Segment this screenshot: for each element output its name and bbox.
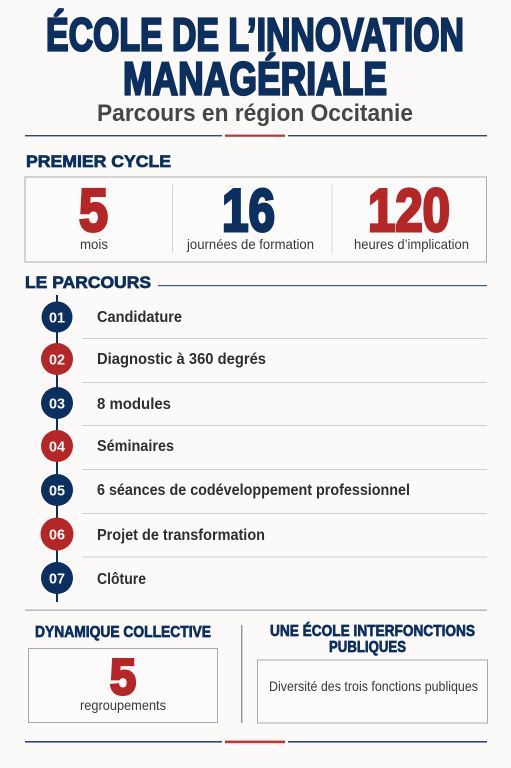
step 04 — [41, 430, 174, 462]
vertical divider — [241, 625, 242, 723]
step 07: Clôture — [97, 571, 146, 588]
stat: 16 journées de formation — [186, 177, 314, 252]
step 07: 07 — [49, 570, 65, 588]
step 04: Séminaires — [97, 438, 174, 455]
section divider — [25, 610, 487, 611]
step 01: 01 — [49, 310, 65, 326]
stat: 120 heures d'implication: heures d’implication — [354, 236, 469, 252]
step 03: 8 modules — [97, 396, 171, 413]
heading: une école interfonctions publiques: UNE ÉCOLE INTERFONCTIONS — [270, 623, 475, 640]
step 05: 6 séances de codéveloppement professionnel — [97, 482, 410, 499]
subtitle: Parcours en région Occitanie — [97, 100, 413, 127]
step 02: Diagnostic à 360 degrés — [97, 351, 266, 368]
heading: premier cycle: PREMIER CYCLE — [26, 152, 171, 171]
panel: dynamique collective — [28, 648, 218, 722]
step 03 — [41, 387, 171, 419]
timeline: le parcours — [40, 295, 487, 602]
step 05 — [41, 474, 410, 506]
stat: 5 mois: mois — [80, 236, 108, 252]
panel: une école interfonctions publiques: Diversité des trois fonctions publiques — [269, 678, 478, 694]
step 06 — [40, 518, 265, 550]
step 06: 06 — [49, 526, 65, 544]
heading: le parcours: LE PARCOURS — [25, 273, 151, 292]
heading: une école interfonctions publiques — [270, 623, 475, 656]
step 06: Projet de transformation — [97, 527, 265, 544]
panel: premier cycle — [25, 177, 486, 262]
step 02: 02 — [49, 352, 65, 368]
step 01: Candidature — [97, 309, 182, 326]
step 07 — [41, 562, 146, 594]
panel: une école interfonctions publiques — [258, 660, 488, 723]
bottom divider rule — [25, 741, 487, 743]
title: MANAGÉRIALE — [123, 52, 387, 104]
heading: dynamique collective: DYNAMIQUE COLLECTIVE — [35, 624, 211, 641]
step 04: 04 — [49, 438, 66, 456]
title — [46, 8, 464, 104]
step 03: 03 — [49, 396, 65, 412]
stat: 5 mois: 5 — [79, 177, 108, 244]
panel: dynamique collective: regroupements — [80, 697, 166, 713]
heading: une école interfonctions publiques: PUBLIQUES — [329, 639, 406, 656]
step 05: 05 — [49, 482, 65, 500]
stat: 16 journées de formation: 16 — [222, 177, 275, 244]
step 01 — [42, 302, 182, 332]
panel: dynamique collective: 5 — [110, 649, 136, 705]
top divider rule — [25, 135, 487, 137]
stat: 120 heures d'implication: 120 — [368, 177, 450, 244]
stat: 16 journées de formation: journées de formation — [186, 236, 314, 252]
step 02 — [41, 343, 266, 375]
